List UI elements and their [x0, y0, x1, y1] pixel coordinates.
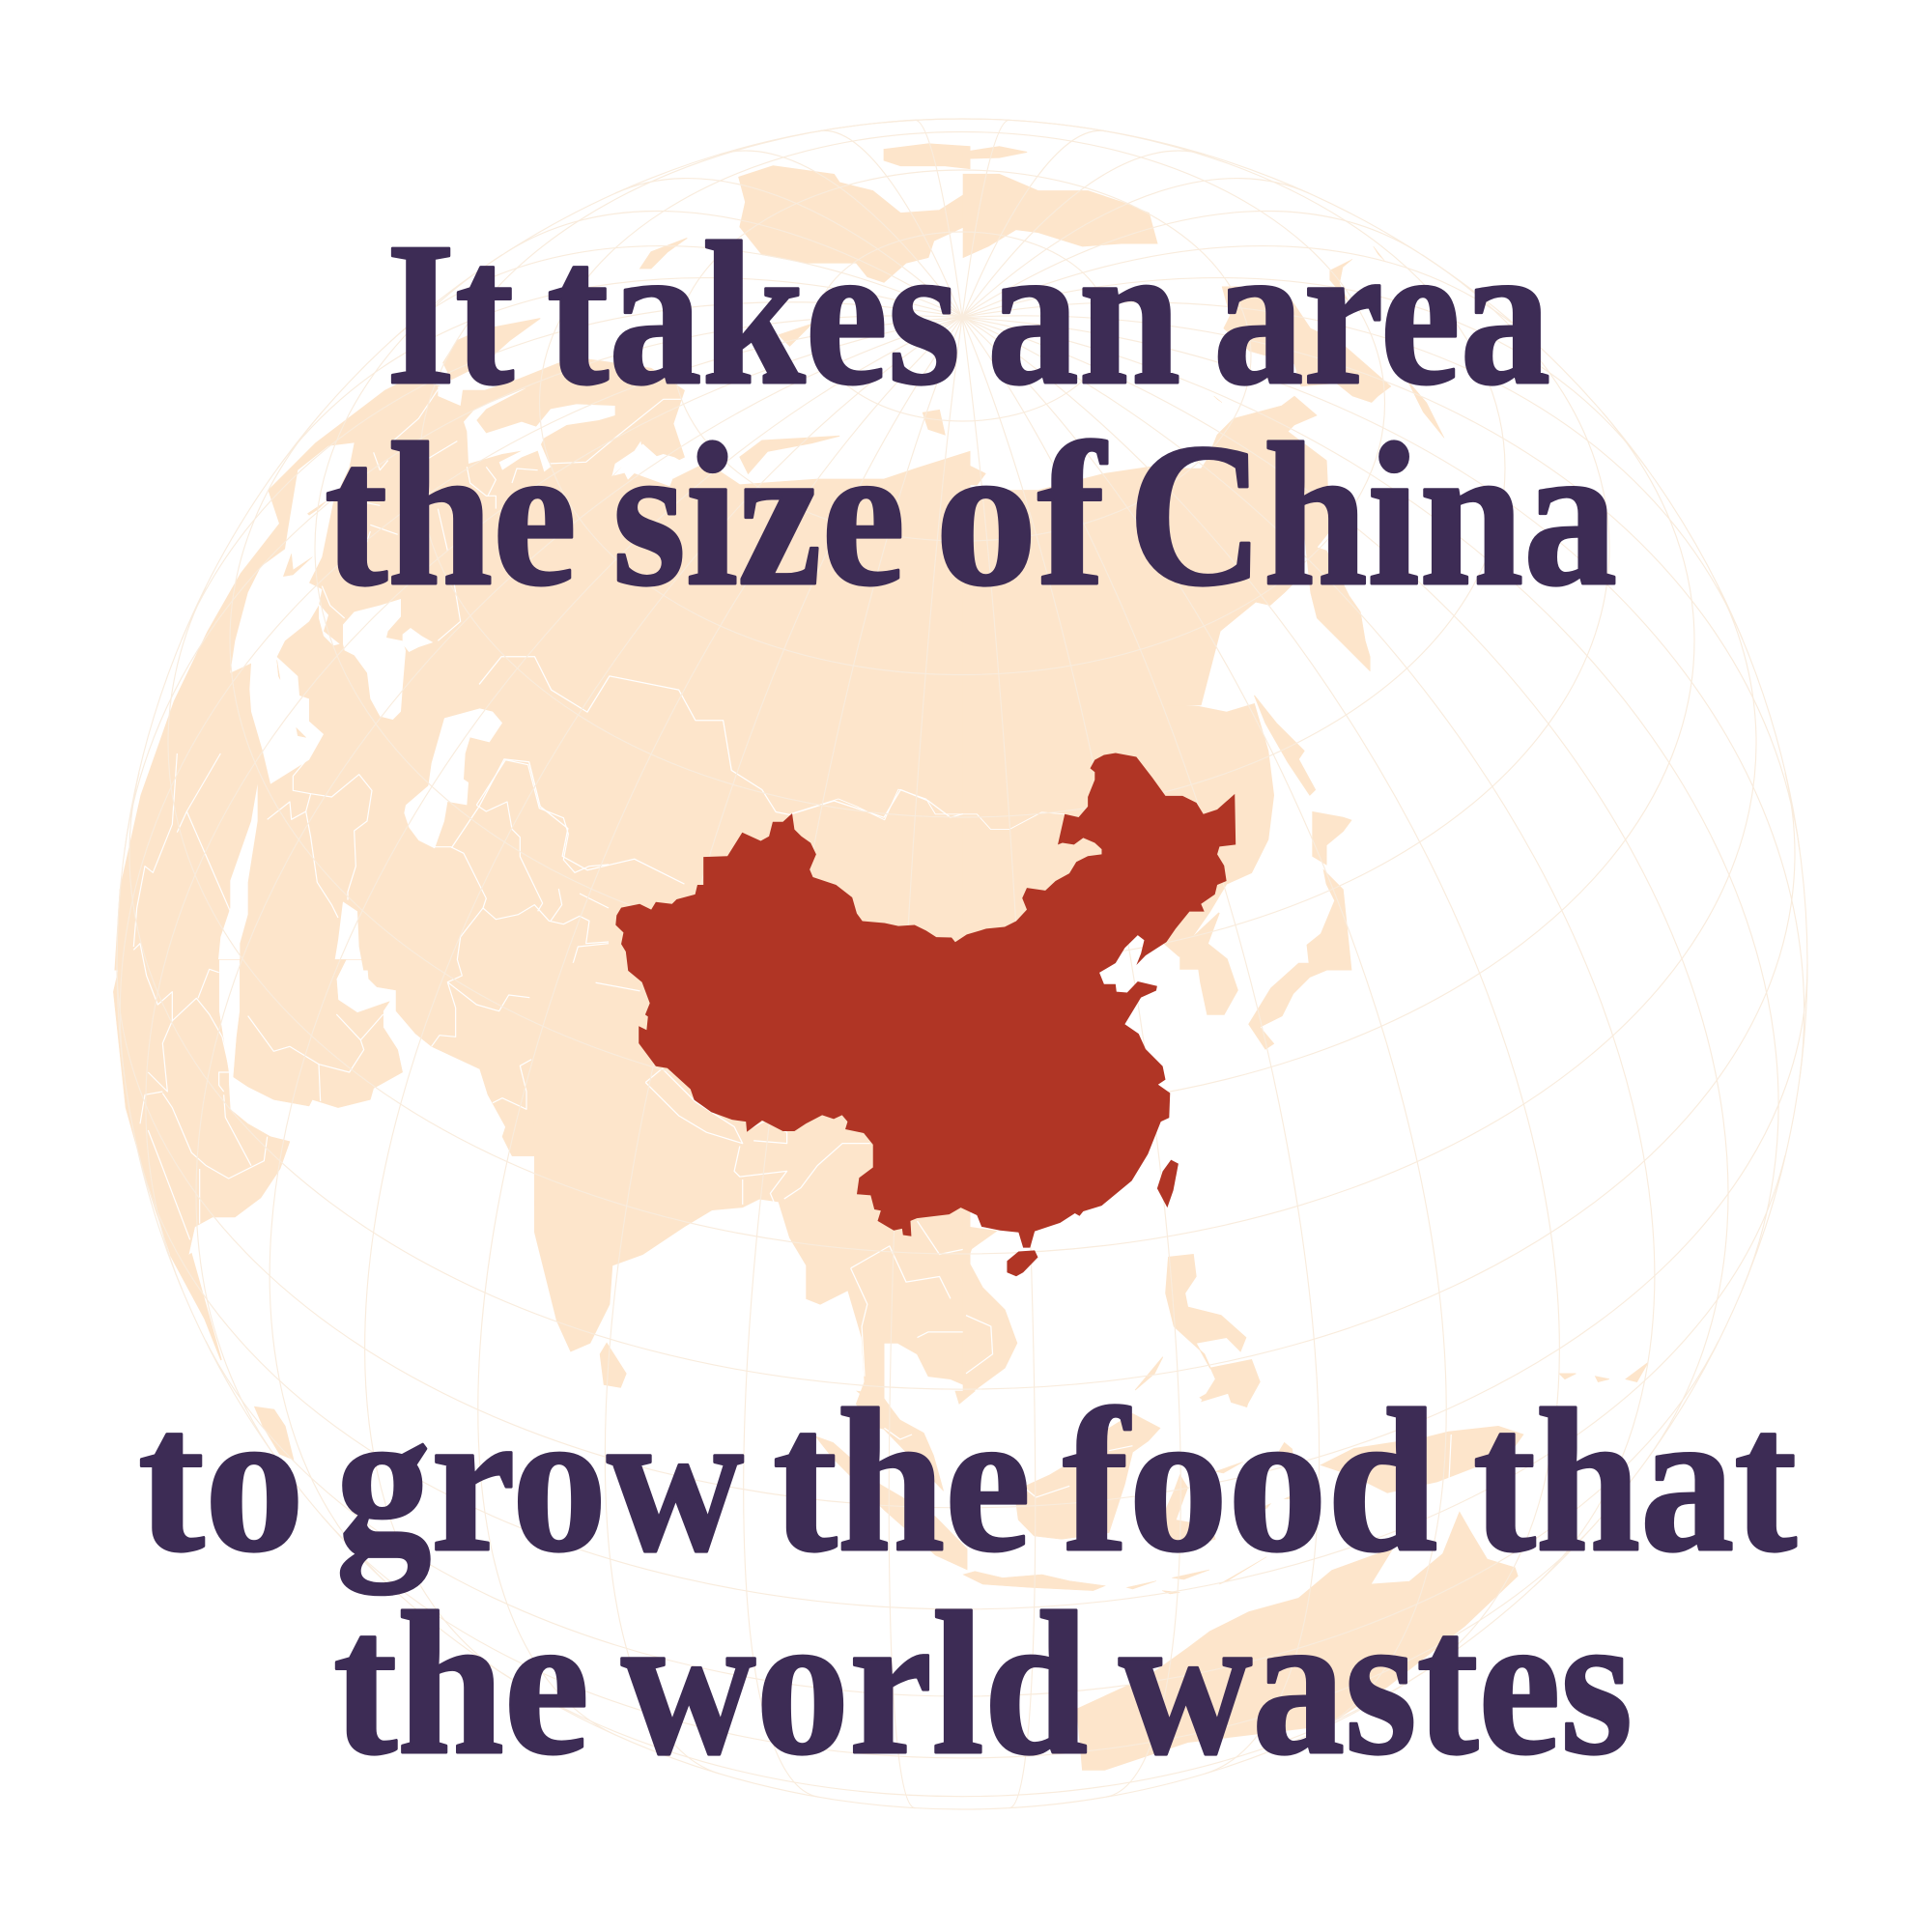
border: Mongolia and Russia: [792, 789, 1065, 830]
line 3: to: [138, 1367, 304, 1594]
parallels: [117, 119, 1807, 1797]
mainland China: [615, 753, 1236, 1248]
globe land masses: [113, 144, 1648, 1770]
land: Madagascar: [255, 1406, 294, 1460]
land: Chukotka, Kamchatka and Alaska: [1157, 246, 1444, 705]
line 3: grow: [336, 1367, 744, 1595]
land: east Siberia: [963, 147, 1351, 970]
line 1: an: [987, 200, 1180, 427]
line 1: takes: [547, 200, 960, 427]
land: Africa, Arabia and Iran: [113, 753, 611, 1258]
line 1: area: [1213, 200, 1550, 427]
heading: bottom: [138, 1367, 1797, 1797]
line 2: China: [1128, 401, 1617, 628]
seas: Mediterranean, Black Sea, Caspian and Baltic: [230, 384, 686, 848]
land: East Africa coast sliver along the globe edge: [171, 1254, 221, 1360]
land: Japan, Philippines and Australia: [963, 963, 1648, 1770]
line 3: food: [1063, 1367, 1437, 1594]
heading: top: [325, 200, 1617, 628]
line 1: [386, 200, 1550, 427]
line 3: [138, 1367, 1797, 1595]
line 4: the: [333, 1570, 589, 1797]
sea: Bohai and Yellow Sea: [1092, 927, 1180, 1063]
line 4: [333, 1570, 1633, 1797]
Taiwan: [1157, 1160, 1179, 1208]
line 4: wastes: [1119, 1570, 1633, 1797]
land: Indonesian archipelago: [815, 1391, 1294, 1594]
line 1: It: [386, 200, 514, 427]
outline circle: [117, 119, 1807, 1809]
line 2: the: [325, 401, 577, 628]
land: Korean peninsula: [1180, 913, 1237, 1014]
line 3: the: [773, 1367, 1031, 1594]
land: India and mainland Southeast Asia: [529, 963, 970, 1454]
land: Europe, Russia and north Asia: [115, 144, 970, 970]
line 4: world: [621, 1570, 1088, 1797]
line 2: of: [935, 401, 1107, 628]
line 3: that: [1473, 1367, 1797, 1594]
Hainan: [1007, 1250, 1037, 1276]
line 2: [325, 401, 1617, 628]
line 2: size: [612, 401, 905, 628]
China map highlighted in red: [615, 753, 1236, 1276]
